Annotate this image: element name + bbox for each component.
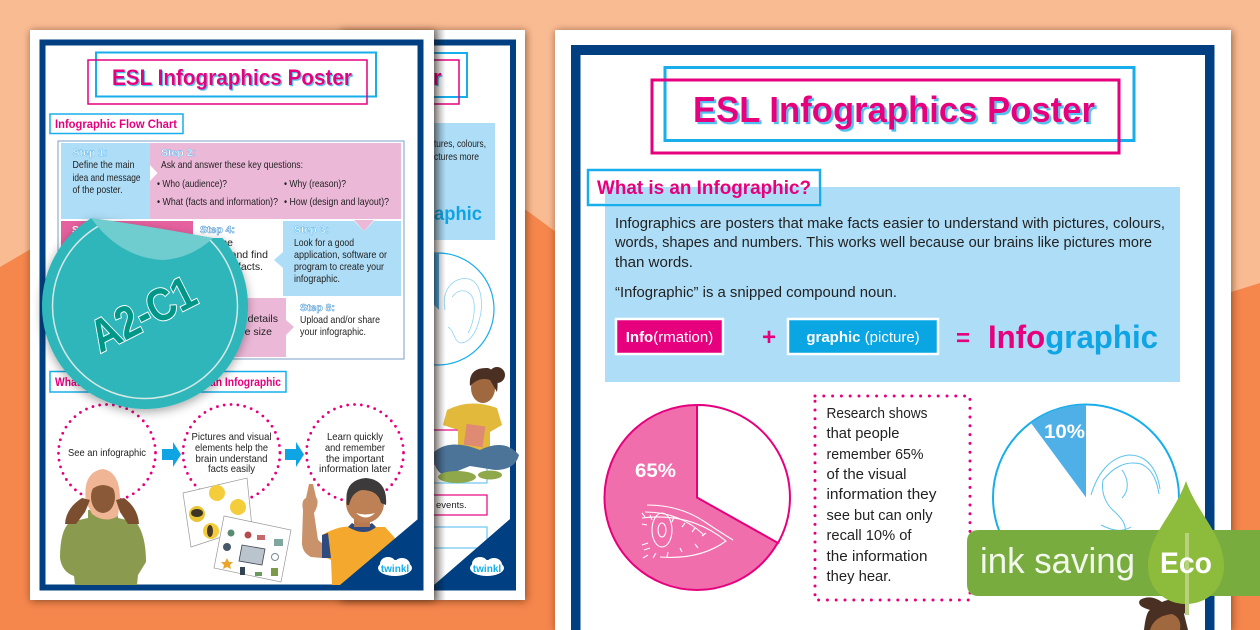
circle: pictures and visual elements: brain understand	[196, 453, 268, 465]
circle: pictures and visual elements: facts easily	[208, 463, 256, 475]
step 3: application, software or	[294, 249, 387, 261]
circle: learn quickly	[306, 404, 404, 502]
equation: Info(rmation)	[626, 329, 713, 346]
definition text: “Infographic” is a snipped compound noun.	[615, 285, 897, 301]
callout: research text: see but can only	[826, 508, 933, 524]
circle: see an infographic	[58, 404, 156, 502]
step 3: infographic.	[294, 273, 340, 285]
eco label: ink saving: Eco	[1160, 547, 1212, 580]
heading: what is an infographic: What is an Infographic?	[597, 178, 811, 199]
definition text: than words.	[615, 255, 693, 271]
step 4: ne	[221, 237, 233, 249]
panel: large right poster	[555, 30, 1231, 630]
step 5 dark pink cell: Step 5:	[72, 224, 107, 236]
arrow 1	[162, 442, 181, 467]
step 3: program to create your	[294, 261, 384, 273]
heading: how we learn	[50, 372, 286, 392]
step 1: Define the main	[72, 159, 135, 171]
large title: ESL Infographics Poster	[693, 89, 1095, 130]
chart: 65% pie with eye: 65%	[635, 461, 676, 482]
panel: what is an infographic	[588, 170, 1180, 382]
icon: woman head peeking	[1139, 597, 1188, 630]
icon: ear	[1091, 455, 1160, 534]
step 2: • Why (reason)?	[284, 178, 346, 190]
chart: 10% pie with ear	[993, 404, 1179, 590]
back poster blue panel	[400, 123, 495, 240]
step 5 dark pink cell	[61, 221, 193, 281]
back poster text boxes	[400, 430, 487, 548]
step 2: • How (design and layout)?	[284, 196, 389, 208]
callout: research text: the information	[826, 549, 928, 565]
step 7 pink cell	[200, 298, 294, 357]
callout: research text: information they	[826, 487, 937, 503]
panel: back poster	[340, 30, 525, 600]
back poster ear pie	[382, 253, 494, 365]
step 4: facts.	[238, 261, 263, 273]
step 8: your infographic.	[300, 326, 366, 338]
step 4	[200, 224, 268, 273]
callout: research text: Research shows	[826, 406, 928, 422]
back poster corner with logo: twinkl	[473, 564, 501, 575]
circle: learn quickly: the important	[326, 453, 384, 465]
step 1: Step 1:	[72, 147, 108, 159]
icon: eye	[642, 505, 733, 558]
step 3: Step 3:	[294, 224, 329, 236]
circle: see an infographic: See an infographic	[68, 447, 146, 459]
equation	[616, 319, 1158, 355]
step 4: and find	[231, 249, 268, 261]
back poster blue panel: tures, colours,	[434, 139, 486, 150]
heading: flow chart	[50, 114, 183, 134]
step 1: of the poster.	[72, 184, 122, 196]
back poster blue panel: ctures more	[434, 152, 479, 163]
icon: green drop	[1148, 481, 1224, 604]
step 2: • What (facts and information)?	[157, 196, 278, 208]
step 2: Ask and answer these key questions:	[161, 159, 303, 171]
icon: woman pointing to ears	[60, 469, 146, 585]
callout: research text: of the visual	[826, 467, 906, 483]
definition text: Infographics are posters that make facts easier to understand with pictures, colours,	[615, 216, 1165, 232]
circle: learn quickly: and remember	[325, 442, 385, 454]
step 1	[61, 143, 150, 219]
definition text	[614, 216, 1165, 301]
callout: research text: that people	[826, 426, 900, 442]
definition text: words, shapes and numbers. This works well because our brains like pictures more	[614, 235, 1152, 251]
equation: +	[762, 324, 776, 351]
circle: learn quickly: information later	[319, 463, 391, 475]
chart: 65% pie with eye	[604, 405, 790, 590]
circle: pictures and visual elements	[183, 404, 280, 502]
eco label: ink saving: ink saving	[980, 540, 1135, 581]
panel: front left poster	[30, 30, 446, 600]
callout: research text	[815, 396, 970, 600]
flow chart	[58, 141, 404, 359]
eco label: ink saving	[967, 481, 1260, 615]
back poster corner with logo	[434, 519, 510, 585]
corner with twinkl logo: twinkl	[381, 564, 409, 575]
step 7 pink cell: l details	[242, 313, 278, 325]
sticker peel	[91, 218, 213, 260]
circle: learn quickly: Learn quickly	[327, 431, 384, 443]
circle: pictures and visual elements: Pictures and visual	[192, 431, 272, 443]
corner with twinkl logo	[340, 519, 418, 585]
step 2: • Who (audience)?	[157, 178, 227, 190]
back poster sitting woman	[434, 367, 519, 483]
icon: boy pointing up	[302, 478, 395, 585]
step 1: idea and message	[72, 172, 141, 184]
icon: sample infographic cards	[183, 478, 291, 582]
chart: 10% pie with ear: 10%	[1044, 422, 1085, 443]
arrow 2	[285, 442, 304, 467]
step 7 pink cell: ure size	[235, 326, 272, 338]
equation: graphic (picture)	[806, 329, 920, 346]
back poster title boxes: r	[433, 65, 442, 90]
large title	[652, 68, 1134, 153]
back poster text boxes: events.	[436, 500, 467, 511]
title	[88, 52, 376, 104]
step 8	[300, 302, 380, 338]
circle: pictures and visual elements: elements help the	[195, 442, 268, 454]
callout: research text: they hear.	[826, 569, 892, 585]
badge: A2-C1 level sticker	[42, 203, 248, 409]
title: ESL Infographics Poster	[112, 65, 352, 90]
equation: =	[956, 325, 970, 352]
callout: research text: recall 10% of	[826, 528, 912, 544]
heading: how we learn: What Helps People Learn From an Infographic	[55, 377, 282, 389]
equation: Infographic	[988, 319, 1158, 355]
back poster title boxes	[370, 53, 467, 104]
step 8: Upload and/or share	[300, 314, 380, 326]
step 2: Step 2:	[161, 147, 196, 159]
step 3	[274, 220, 401, 296]
badge label: A2-C1	[81, 265, 204, 362]
step 4: Step 4:	[200, 224, 235, 236]
callout: research text: remember 65%	[826, 447, 924, 463]
heading: what is an infographic	[588, 170, 820, 205]
heading: flow chart: Infographic Flow Chart	[55, 119, 177, 131]
step 3: Look for a good	[294, 237, 354, 249]
step 2	[150, 143, 401, 219]
step 8: Step 8:	[300, 302, 335, 314]
back poster blue panel: aphic	[434, 204, 482, 225]
